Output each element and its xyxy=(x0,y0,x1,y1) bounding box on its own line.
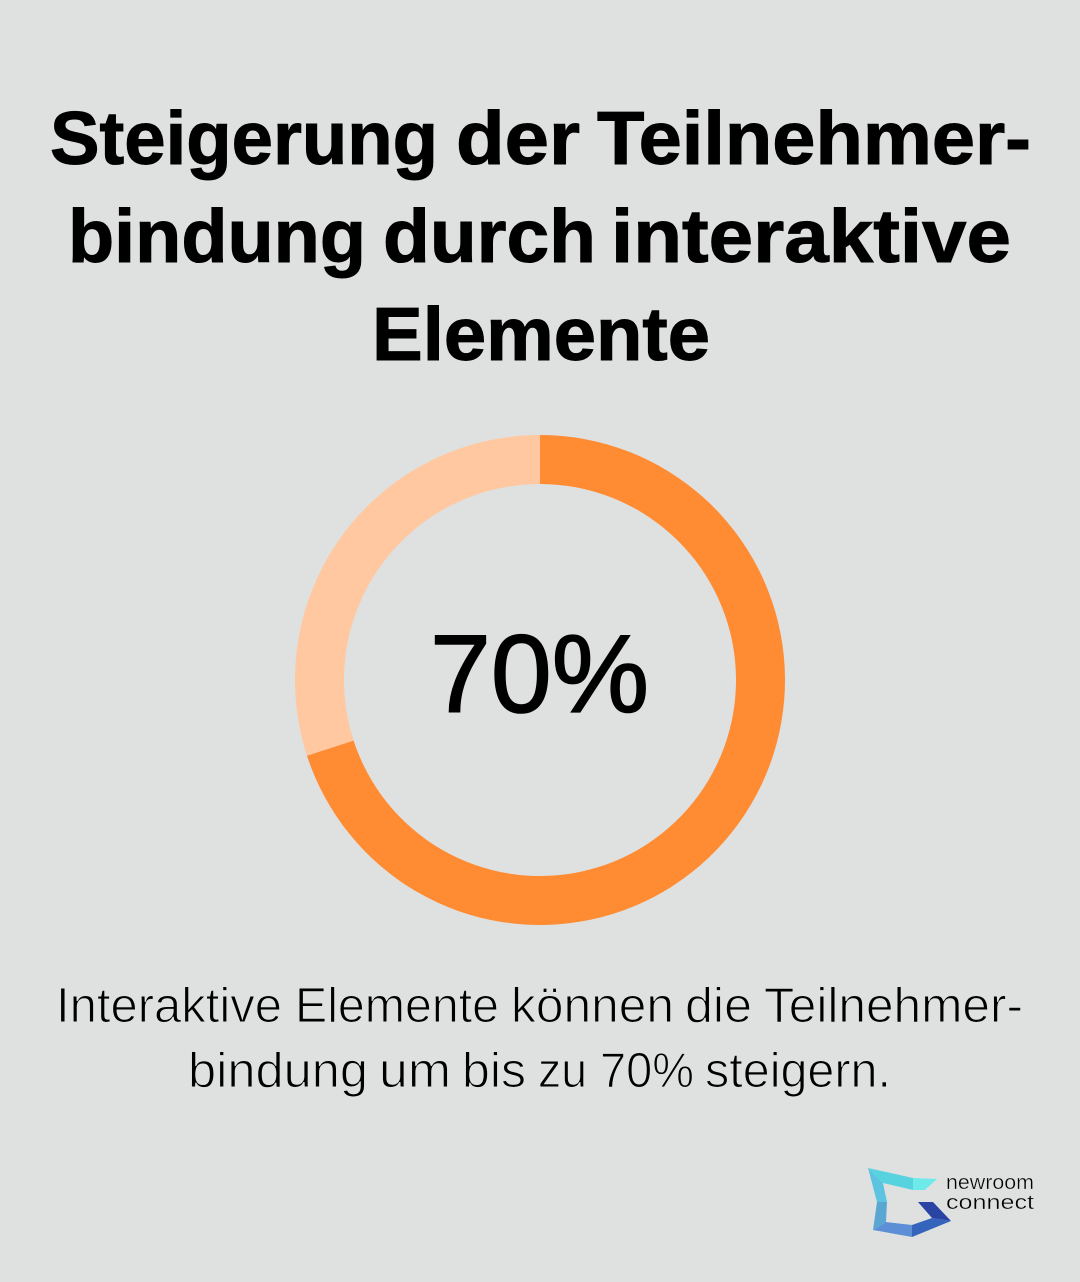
logo wordmark xyxy=(946,1172,1035,1214)
title: der xyxy=(456,96,580,180)
description text: die xyxy=(685,979,752,1033)
description text: bindung xyxy=(188,1044,368,1098)
description text: Elemente xyxy=(295,979,499,1033)
description text xyxy=(56,979,1023,1098)
title: bindung xyxy=(68,194,366,278)
description text: können xyxy=(511,979,674,1033)
title: Steigerung xyxy=(50,96,438,180)
logo mark xyxy=(868,1168,951,1237)
title: interaktive xyxy=(611,194,1011,278)
donut value segment xyxy=(307,435,785,925)
description text: bis xyxy=(462,1044,526,1098)
title xyxy=(50,96,1031,376)
title: durch xyxy=(383,194,596,278)
description text: Teilnehmer- xyxy=(764,979,1023,1033)
description text: um xyxy=(379,1044,451,1098)
donut value label: 70% xyxy=(430,613,649,736)
title: Elemente xyxy=(372,292,710,376)
logo wordmark: newroom xyxy=(946,1172,1034,1194)
description text: 70% xyxy=(600,1044,694,1098)
logo: newroom connect xyxy=(868,1168,1035,1237)
donut remainder segment xyxy=(295,435,540,756)
description text: Interaktive xyxy=(56,979,282,1033)
description text: steigern. xyxy=(705,1044,891,1098)
donut chart: 70% xyxy=(295,435,785,925)
description text: zu xyxy=(538,1044,587,1098)
title: Teilnehmer- xyxy=(597,96,1031,180)
logo wordmark: connect xyxy=(946,1192,1035,1214)
